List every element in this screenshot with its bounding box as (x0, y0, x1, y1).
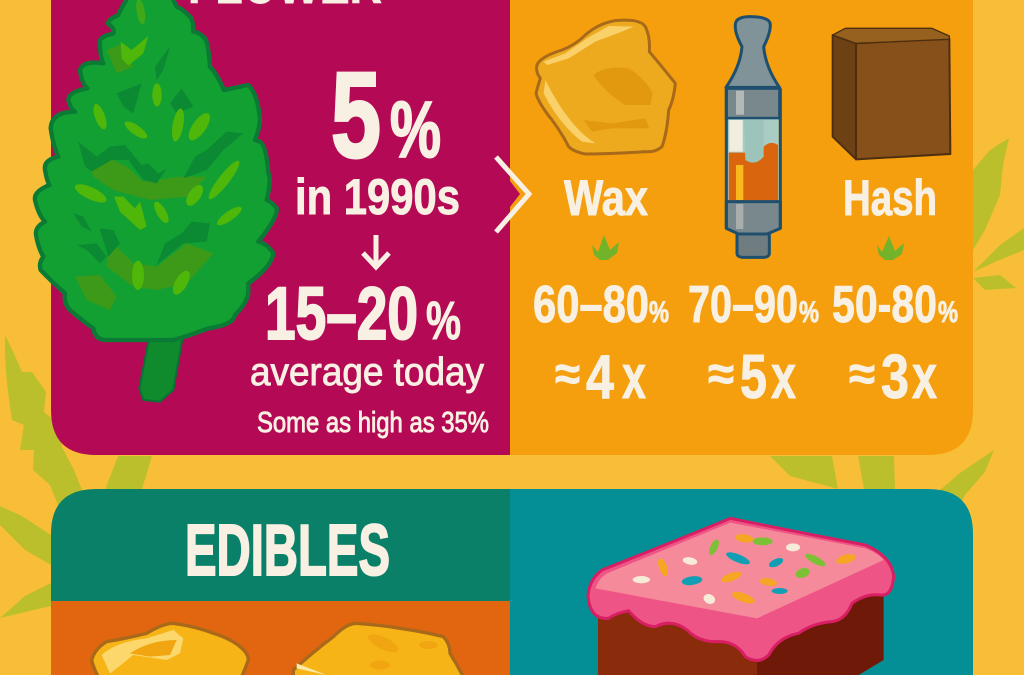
stat: wax potency: % (649, 296, 669, 329)
label: wax: Wax (564, 170, 648, 226)
icon: small leaf hash (877, 236, 904, 260)
stat: wax potency: 4 (586, 343, 614, 412)
stat: hash potency: ≈ (849, 348, 875, 401)
arrow: chevron (496, 157, 529, 232)
panel: edibles heading band (51, 489, 510, 601)
stat: hash potency: 50-80 (832, 276, 937, 334)
stat: 5% in 1990s: in 1990s (295, 169, 460, 225)
stat: vape potency: x (771, 343, 796, 412)
stat: 15-20% average today: 15–20 (265, 272, 418, 355)
stat: hash potency: 3 (881, 343, 909, 412)
stat: wax potency: 60–80 (533, 276, 649, 334)
stat: 5% in 1990s: 5 (331, 47, 381, 183)
icon: frosted brownie (588, 518, 894, 675)
icon: small leaf wax (592, 235, 619, 260)
panel: brownie (510, 489, 973, 675)
stat: 5% in 1990s: % (390, 85, 441, 174)
stat: wax potency (533, 276, 669, 412)
icon: gummy right (293, 623, 465, 675)
stat: 15-20% average today: average today (250, 351, 484, 394)
stat: wax potency: x (622, 343, 646, 412)
stat: hash potency (832, 276, 958, 412)
panel: concentrates (510, 0, 973, 455)
arrow: down (363, 235, 389, 267)
label: hash: Hash (843, 170, 937, 226)
stat: hash potency: % (938, 296, 958, 329)
icon: wax (536, 20, 675, 154)
stat: vape potency: 70–90 (688, 276, 798, 334)
panel: gummies (51, 601, 510, 675)
stat: 5% in 1990s (295, 47, 460, 225)
icon: hash block (833, 28, 950, 159)
stat: wax potency: ≈ (555, 348, 580, 401)
heading: edibles: EDIBLES (185, 511, 390, 591)
stat: vape potency (688, 276, 819, 412)
stat: 15-20% average today: % (426, 291, 461, 351)
stat: 15-20% average today: Some as high as 35% (257, 407, 489, 439)
stat: hash potency: x (912, 343, 937, 412)
sprinkles (633, 533, 857, 606)
stat: vape potency: % (799, 296, 819, 329)
panel: flower potency (51, 0, 510, 455)
stat: vape potency: ≈ (708, 348, 734, 401)
background cannabis leaves (0, 138, 1024, 618)
icon: vape cartridge (726, 17, 780, 257)
icon: gummy left (92, 623, 248, 675)
icon: cannabis bud (35, 0, 277, 402)
stat: vape potency: 5 (740, 343, 767, 412)
stat: 15-20% average today (250, 272, 489, 439)
